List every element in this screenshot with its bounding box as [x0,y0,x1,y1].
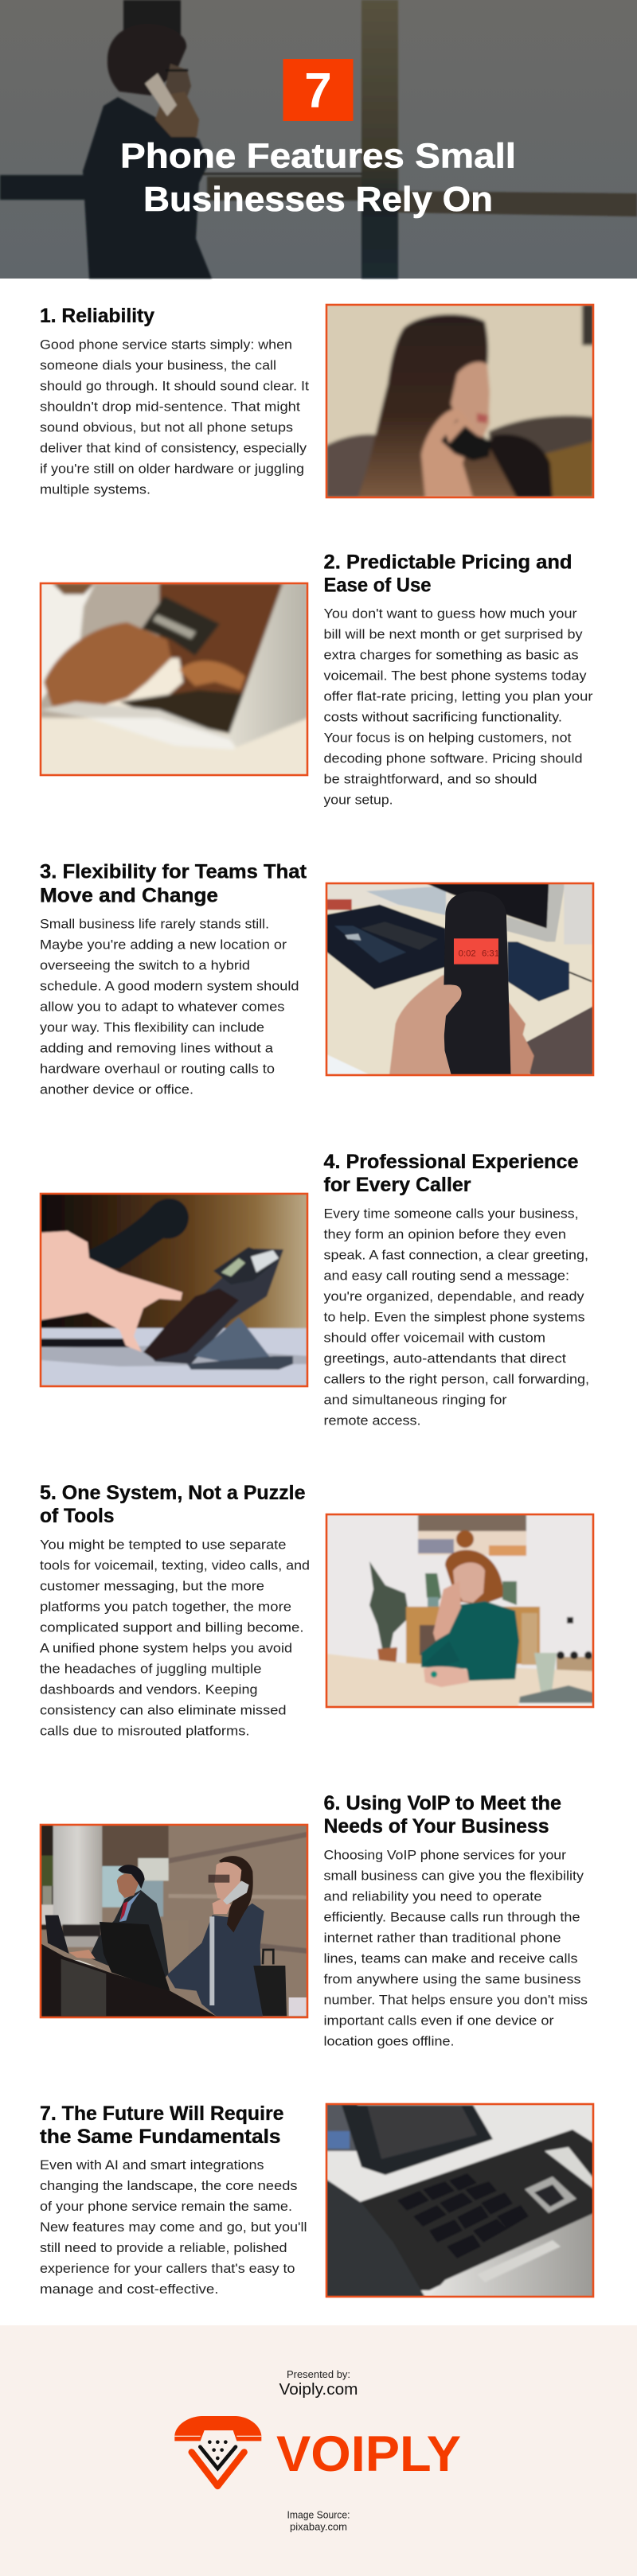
presented by: Voiply.com [279,2381,358,2399]
photo: hand holding card at laptop [40,583,308,776]
body text: You might be tempted to use separate [40,1537,287,1552]
body text: sound obvious, but not all phone setups [40,420,293,435]
heading: Ease of Use [323,575,432,597]
body text: allow you to adapt to whatever comes [40,1000,285,1014]
icon: telephone [174,2416,261,2486]
body text: small business can give you the flexibility [323,1869,584,1883]
body text: from anywhere using the same business [323,1972,581,1986]
body text: if you're still on older hardware or juggling [40,462,304,476]
heading: 3. Flexibility for Teams That [40,861,307,883]
heading: 1. Reliability [40,305,154,327]
body text: New features may come and go, but you'll [40,2219,307,2235]
body text: internet rather than traditional phone [323,1931,561,1945]
presented by [279,2368,358,2399]
heading [323,1151,579,1196]
counter [40,1943,223,2020]
panel: 3. Flexibility [40,861,605,1097]
body text: platforms you patch together, the more [40,1600,291,1614]
body text: the headaches of juggling multiple [40,1662,261,1676]
body text: your setup. [323,793,393,807]
body text: tools for voicemail, texting, video calls, and [40,1558,310,1572]
heading: 6. Using VoIP to Meet the [323,1792,561,1814]
body text: adding and removing lines without a [40,1041,274,1055]
panel: 1. Reliability [40,304,594,498]
badge: number 7: 7 [304,64,332,119]
body text: your way. This flexibility can include [40,1020,264,1035]
panel: 5. One System [40,1482,594,1738]
body text: and simultaneous ringing for [323,1393,507,1407]
photo: hand dialing desk phone [40,1193,308,1387]
body text: extra charges for something as basic as [323,648,578,662]
wordmark: VOIPLY [276,2426,461,2482]
hero background photo: man on phone [0,0,637,279]
body text: important calls even if one device or [323,2013,554,2028]
body text [40,1537,310,1738]
panel: 7. The Future [40,2102,594,2297]
body text: voicemail. The best phone systems today [323,668,587,683]
panel: 4. Professional Experience [40,1151,589,1428]
body text: decoding phone software. Pricing should [323,751,583,766]
photo: desk phone keypad close-up [326,2103,594,2297]
body text: hardware overhaul or routing calls to [40,1062,275,1076]
body text: to help. Even the simplest phone systems [323,1310,584,1324]
body text: overseeing the switch to a hybrid [40,958,250,972]
heading: the Same Fundamentals [40,2126,280,2148]
body text [40,2157,307,2297]
body text: shouldn't drop mid-sentence. That might [40,399,300,414]
heading [323,551,572,597]
body text: and reliability you need to operate [323,1889,541,1904]
body text [323,1848,588,2048]
monitors [100,1922,170,1991]
heading: Needs of Your Business [323,1815,549,1837]
body text: bill will be next month or get surprised by [323,627,583,641]
heading: 2. Predictable Pricing and [323,551,572,573]
body text: Every time someone calls your business, [323,1206,578,1221]
body text: Maybe you're adding a new location or [40,937,287,952]
photo: cordless phone in hand: 0:02 [459,949,476,959]
photo: woman at table on phone [326,1514,594,1708]
body text: lines, teams can make and receive calls [323,1951,578,1966]
body text: another device or office. [40,1082,193,1097]
image source: Image Source: [287,2510,350,2521]
body text: schedule. A good modern system should [40,979,299,993]
body text: deliver that kind of consistency, especially [40,441,307,455]
body text: callers to the right person, call forwarding, [323,1372,589,1386]
body text: You don't want to guess how much your [323,606,577,621]
body text: Even with AI and smart integrations [40,2157,264,2173]
heading: of Tools [40,1505,115,1527]
heading: 4. Professional Experience [323,1151,579,1173]
body text: remote access. [323,1413,420,1428]
body text: changing the landscape, the core needs [40,2178,298,2193]
body text: still need to provide a reliable, polished [40,2240,287,2255]
heading: for Every Caller [323,1174,471,1196]
woman [167,1904,264,2017]
title: Businesses Rely On [143,180,493,219]
body text: speak. A fast connection, a clear greeting, [323,1248,588,1262]
body text: offer flat-rate pricing, letting you plan your [323,689,593,703]
heading [40,1482,306,1527]
heading: 5. One System, Not a Puzzle [40,1482,306,1504]
heading: Move and Change [40,885,218,907]
photo: cordless phone in hand: 6:31 [482,949,499,959]
heading: 7. The Future Will Require [40,2102,284,2125]
badge: number 7 [283,59,354,121]
body text: you're organized, dependable, and ready [323,1289,584,1304]
body text: A unified phone system helps you avoid [40,1641,292,1655]
man [89,1890,169,1988]
photo: cordless phone in hand [318,875,605,1082]
title: Phone Features Small [120,137,516,175]
body text: costs without sacrificing functionality. [323,710,562,724]
body text: dashboards and vendors. Keeping [40,1682,258,1697]
body text [323,1206,589,1428]
body text: should go through. It should sound clear. It [40,379,309,393]
body text: Choosing VoIP phone services for your [323,1848,566,1862]
photo: woman on phone [326,304,594,498]
body text: calls due to misrouted platforms. [40,1724,250,1738]
body text: be straightforward, and so should [323,772,537,786]
body text: number. That helps ensure you don't miss [323,1993,588,2007]
man silhouette [83,97,212,279]
footer [0,2325,637,2576]
heading [40,2102,284,2148]
body text: greetings, auto-attendants that direct [323,1351,566,1366]
body text: they form an opinion before they even [323,1227,566,1241]
body text: should offer voicemail with custom [323,1331,545,1345]
photo: receptionists at front desk [32,1818,318,2025]
body text: Your focus is on helping customers, not [323,731,572,745]
body text [323,606,593,807]
title [120,137,516,219]
panel: 6. Using VoIP [32,1792,588,2048]
hero banner [0,0,637,279]
image source [287,2510,350,2532]
body text: experience for your callers that's easy to [40,2261,295,2276]
logo [174,2416,461,2486]
body text: efficiently. Because calls run through the [323,1910,580,1924]
body text: Good phone service starts simply: when [40,337,292,352]
presented by: Presented by: [287,2368,350,2380]
body text: multiple systems. [40,482,150,497]
body text: someone dials your business, the call [40,358,276,372]
body text: Small business life rarely stands still. [40,917,269,931]
body text: of your phone service remain the same. [40,2199,292,2214]
body text: customer messaging, but the more [40,1579,264,1593]
body text: location goes offline. [323,2034,454,2048]
heading [323,1792,561,1837]
panel: 2. Predictable Pricing [40,551,593,807]
body text: consistency can also eliminate missed [40,1703,287,1717]
body text [40,337,309,497]
body text: manage and cost-effective. [40,2282,218,2297]
image source: pixabay.com [290,2521,347,2532]
body text: complicated support and billing become. [40,1620,304,1635]
body text: and easy call routing send a message: [323,1269,569,1283]
body text [40,917,299,1097]
heading [40,861,307,907]
